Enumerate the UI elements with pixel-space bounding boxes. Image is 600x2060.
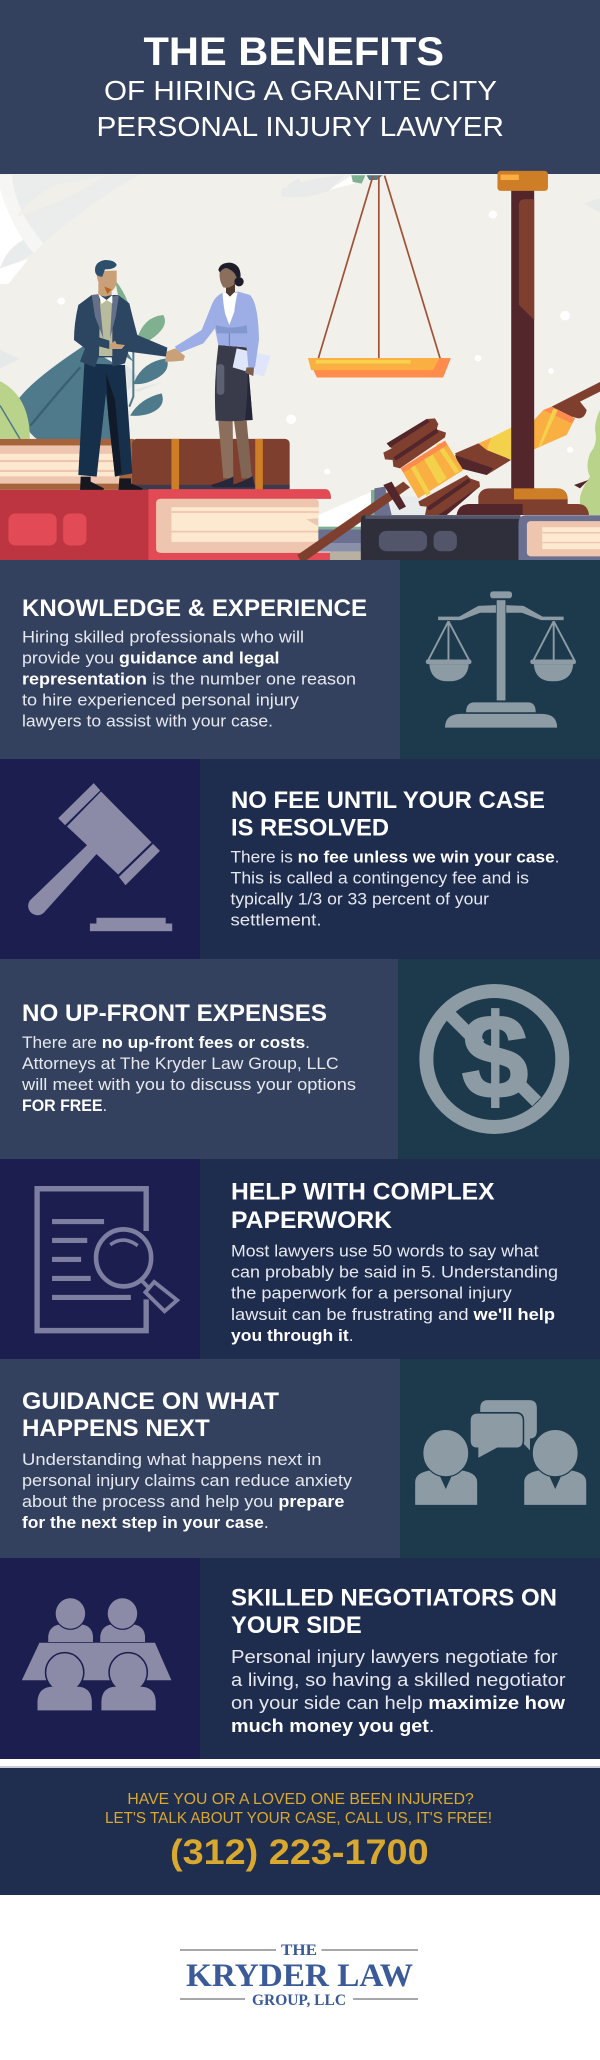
heading: IS RESOLVED: [231, 814, 389, 842]
phone number: (312) 223-1700: [170, 1833, 429, 1872]
body text: can probably be said in 5. Understanding: [231, 1264, 558, 1282]
body text: Most lawyers use 50 words to say what: [231, 1243, 539, 1261]
figures and small leaves: [74, 260, 271, 493]
icon: scales of justice: [426, 591, 576, 728]
body text: [21, 1034, 356, 1115]
title: the benefits: THE BENEFITS: [144, 30, 444, 74]
heading: YOUR SIDE: [231, 1612, 362, 1639]
body text: [231, 1647, 566, 1736]
heading: GUIDANCE ON WHAT: [22, 1388, 279, 1415]
man in navy suit: [74, 260, 185, 493]
body text: provide you guidance and legal: [22, 649, 280, 667]
call to action text: HAVE YOU OR A LOVED ONE BEEN INJURED?: [127, 1791, 474, 1808]
base of large scale: [457, 488, 589, 515]
panel: title header: [0, 0, 600, 175]
body text: about the process and help you prepare: [22, 1493, 344, 1511]
subtitle line one: OF HIRING A GRANITE CITY: [104, 75, 497, 106]
logo: the kryder law group: GROUP, LLC: [252, 1992, 346, 2009]
icon: crossed-out dollar: $: [462, 990, 528, 1124]
panel 3: no up-front expenses: [0, 959, 600, 1159]
body text: lawyers to assist with your case.: [22, 712, 273, 730]
heading: [231, 787, 545, 842]
body text: Hiring skilled professionals who will: [22, 628, 304, 646]
heading: [231, 1585, 557, 1639]
heading: PAPERWORK: [231, 1207, 393, 1234]
panel: call to action: [0, 1768, 600, 1895]
body text: [231, 1243, 558, 1345]
heading: [231, 1178, 494, 1234]
panel 2: no fee until resolved: [0, 759, 600, 959]
body text: the paperwork for a personal injury: [231, 1285, 513, 1303]
body text: [22, 628, 356, 730]
scale hanging pan: [308, 176, 451, 377]
body text: lawsuit can be frustrating and we'll help: [231, 1306, 555, 1324]
panel 1: knowledge and experience: [0, 560, 600, 759]
body text: There is no fee unless we win your case .: [230, 848, 560, 866]
body text: Personal injury lawyers negotiate for: [231, 1647, 558, 1667]
heading: NO FEE UNTIL YOUR CASE: [231, 787, 545, 814]
large background plants: [0, 345, 115, 440]
body text: you through it .: [231, 1327, 354, 1345]
striped pen, column, base and bush: [455, 382, 600, 515]
icon: two people talking: [415, 1400, 586, 1505]
body text: typically 1/3 or 33 percent of your: [230, 890, 490, 908]
heading: SKILLED NEGOTIATORS ON: [231, 1585, 557, 1612]
books: dark book and slate book: [361, 515, 600, 560]
body text: will meet with you to discuss your options: [21, 1076, 356, 1094]
icon: people around a table: [22, 1598, 171, 1710]
body text: for the next step in your case .: [22, 1514, 269, 1532]
books: red book with pages: [0, 489, 331, 560]
body text: [22, 1451, 353, 1532]
heading: KNOWLEDGE & EXPERIENCE: [22, 595, 367, 622]
call to action text: LET'S TALK ABOUT YOUR CASE, CALL US, IT'S FREE!: [105, 1810, 492, 1827]
body text: a living, so having a skilled negotiator: [231, 1670, 566, 1690]
column of large scale: [497, 171, 548, 491]
heading: HAPPENS NEXT: [22, 1415, 210, 1442]
logo: the kryder law group: THE: [281, 1942, 317, 1959]
call to action text: [105, 1791, 492, 1827]
small leaves: [115, 280, 168, 416]
body text: settlement.: [230, 912, 322, 930]
logo: the kryder law group: KRYDER LAW: [186, 1958, 413, 1994]
panel 4: complex paperwork: [0, 1159, 600, 1359]
icon: document with magnifier: [37, 1189, 177, 1331]
heading: NO UP-FRONT EXPENSES: [22, 1000, 327, 1027]
body text: [230, 848, 560, 930]
body text: to hire experienced personal injury: [22, 691, 300, 709]
logo: the kryder law group: [180, 1942, 418, 2009]
body text: This is called a contingency fee and is: [230, 869, 529, 887]
heading: HELP WITH COMPLEX: [231, 1178, 494, 1205]
body text: personal injury claims can reduce anxiety: [22, 1472, 353, 1490]
body text: There are no up-front fees or costs .: [22, 1034, 310, 1052]
body text: on your side can help maximize how: [231, 1693, 566, 1713]
woman in blue blouse: [175, 263, 271, 487]
heading: [22, 1388, 279, 1442]
body text: representation is the number one reason: [22, 670, 356, 688]
panel 6: skilled negotiators: [0, 1558, 600, 1759]
panel 5: what happens next: [0, 1359, 600, 1558]
icon: gavel: [28, 783, 172, 931]
body text: FOR FREE.: [22, 1097, 107, 1115]
books: top left brown books: [0, 439, 290, 490]
icon: crossed-out dollar: [426, 990, 562, 1127]
illustration: lawyers shaking hands with scales, gavel and books: [0, 171, 600, 560]
background leaf shapes: [0, 175, 300, 368]
body text: Attorneys at The Kryder Law Group, LLC: [22, 1055, 339, 1073]
body text: Understanding what happens next in: [22, 1451, 322, 1469]
gavel and stacked grey books: [297, 418, 480, 560]
white dots: [57, 211, 573, 475]
body text: much money you get .: [231, 1716, 434, 1736]
subtitle line two: PERSONAL INJURY LAWYER: [96, 111, 504, 142]
